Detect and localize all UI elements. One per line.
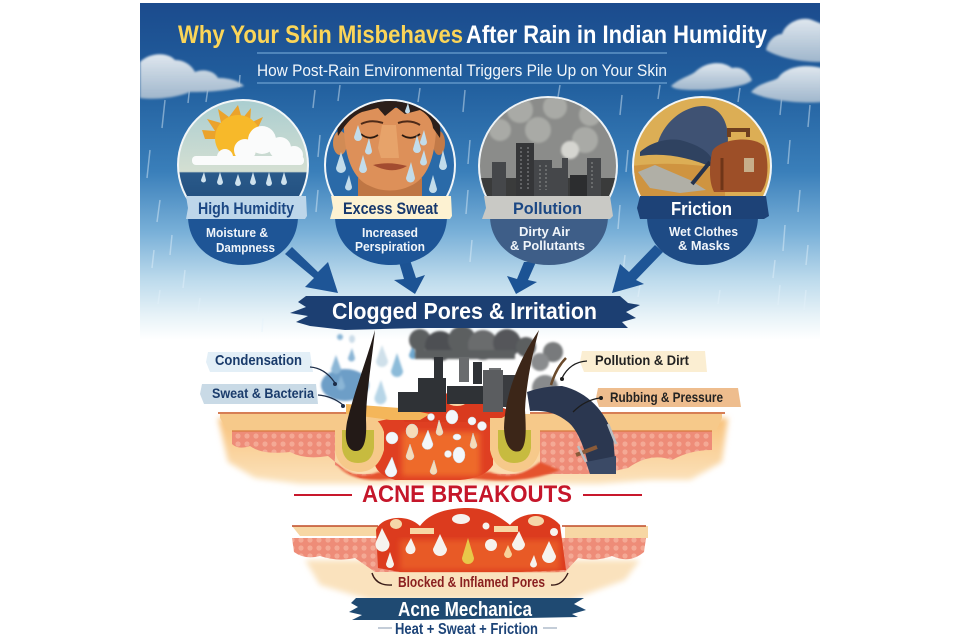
banner label [482, 196, 613, 219]
banner label [637, 196, 769, 219]
banner label: High Humidity [198, 199, 294, 218]
icon: cap, mask and bag [634, 98, 770, 196]
lower wash [305, 560, 640, 600]
pus droplets [376, 514, 558, 568]
subtitle: How Post-Rain Environmental Triggers Pile Up on Your Skin [257, 61, 667, 80]
label: Condensation: Condensation [215, 352, 302, 369]
panel: Excess Sweat [324, 99, 456, 265]
illustration: factory [398, 357, 515, 412]
arrow: sweat to pores [394, 260, 425, 294]
label: Pollution & Dirt: Pollution & Dirt [595, 352, 689, 368]
droplets [385, 410, 486, 477]
lower pill [335, 216, 447, 265]
description [510, 224, 585, 253]
inflamed zone [375, 416, 493, 480]
description: Wet Clothes [669, 224, 738, 239]
description [669, 224, 738, 253]
title: Why Your Skin Misbehaves [178, 21, 463, 49]
title [178, 21, 767, 49]
illustration: water droplets [321, 334, 417, 404]
description [206, 225, 275, 255]
clouds: left [140, 54, 244, 99]
lower pill [188, 216, 298, 265]
banner label: Friction [671, 199, 732, 219]
illustration: small hair [551, 358, 566, 385]
clogged follicle right [490, 418, 540, 472]
illustration: smoke [409, 326, 563, 401]
banner: Acne Mechanica: Acne Mechanica [398, 599, 533, 621]
description: & Masks [678, 238, 730, 253]
panel: Friction [632, 96, 772, 265]
lower pill [647, 216, 758, 265]
rain streaks [147, 60, 810, 332]
banner label: Excess Sweat [343, 199, 438, 218]
lower pill [490, 216, 608, 265]
description: Moisture & [206, 225, 268, 240]
description: Perspiration [355, 239, 425, 254]
label: Rubbing & Pressure: Rubbing & Pressure [610, 389, 723, 405]
banner: Acne Mechanica [349, 598, 586, 621]
banner: Clogged Pores & Irritation: Clogged Pores & Irritation [332, 298, 597, 324]
clouds: right [671, 19, 822, 103]
illustration: right hair [504, 330, 539, 452]
icon: smoggy city [480, 98, 616, 196]
label: Pollution & Dirt [560, 351, 707, 381]
description: Increased [362, 225, 418, 240]
illustration: main skin cross-section [218, 392, 728, 484]
label: Sweat & Bacteria: Sweat & Bacteria [212, 385, 314, 401]
illustration: close-up inflamed skin [292, 508, 648, 600]
red base under follicles [335, 462, 560, 481]
caption: Blocked & Inflamed Pores: Blocked & Inflamed Pores [398, 574, 545, 591]
caption: Heat + Sweat + Friction: Heat + Sweat + Friction [395, 621, 538, 638]
skin wash [218, 418, 728, 484]
banner label: Pollution [513, 199, 582, 218]
inflamed domes [376, 508, 566, 572]
upper skin band [292, 526, 648, 538]
label: Sweat & Bacteria [200, 384, 345, 408]
illustration: left hair [346, 330, 375, 451]
title: After Rain in Indian Humidity [466, 21, 767, 49]
label: Rubbing & Pressure [573, 388, 741, 412]
description [355, 225, 425, 254]
label: Condensation [206, 352, 337, 386]
skin top layer [220, 414, 722, 431]
description: Dampness [216, 240, 275, 255]
icon: sun and rain cloud [179, 101, 307, 196]
panel: High Humidity [175, 99, 311, 265]
description: Dirty Air [519, 224, 570, 239]
panel: Pollution [478, 95, 618, 265]
skin dermis [232, 430, 712, 478]
illustration: friction strap [527, 386, 616, 474]
arrow: pollution to pores [507, 262, 537, 294]
crust on skin [346, 404, 430, 420]
clogged follicle left [335, 418, 384, 472]
icon: sweating face [326, 101, 454, 196]
arrow: humidity to pores [285, 247, 338, 293]
description: & Pollutants [510, 238, 585, 253]
panel: rainy sky background [140, 3, 820, 340]
dermis [292, 538, 646, 572]
banner: Clogged Pores & Irritation [290, 296, 640, 330]
pimple dome [402, 392, 512, 422]
heading: ACNE BREAKOUTS: ACNE BREAKOUTS [362, 481, 572, 508]
arrow: friction to pores [612, 245, 663, 293]
